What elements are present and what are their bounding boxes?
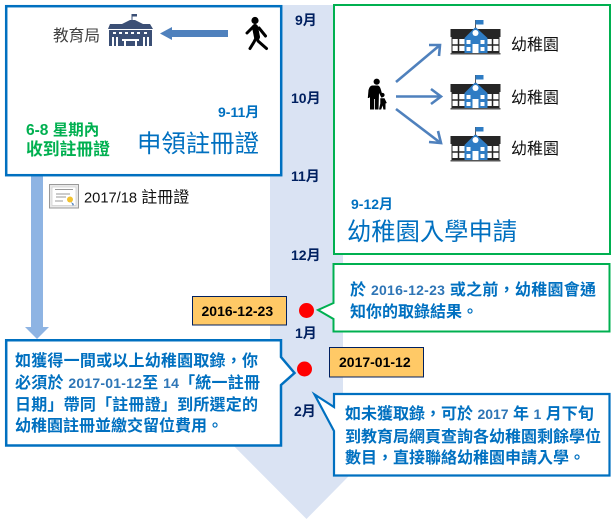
callout: if not admitted: 數目，直接聯絡幼稚園申請入學。 <box>345 448 585 467</box>
date tag: 2017-01-12 <box>330 348 424 377</box>
arrows: parent to kindergartens <box>396 45 441 143</box>
label: kindergarten 3: 幼稚園 <box>511 140 559 158</box>
arrow: certificate to enrolment <box>25 176 49 339</box>
month labels: 1月 <box>295 325 317 341</box>
date tag: 2016-12-23: 2016-12-23 <box>202 303 273 319</box>
callout: enrolment instructions: 幼稚園註冊並繳交留位費用。 <box>15 416 223 435</box>
heading: kindergarten admission application: 幼稚園入學申請 <box>347 219 517 246</box>
icon: walking person <box>247 17 266 48</box>
callout: if not admitted: 如未獲取錄，可於 2017 年 1 月下旬 <box>345 404 594 423</box>
note: certificate received in 6-8 weeks: 收到註冊證 <box>26 139 110 159</box>
marker: 2016-12-23 <box>299 303 314 318</box>
callout: enrolment instructions: 日期」帶同「註冊證」到所選定的 <box>15 395 258 414</box>
date: 9-12 months: 9-12月 <box>351 196 393 212</box>
callout: enrolment instructions: 如獲得一間或以上幼稚園取錄，你 <box>15 351 258 370</box>
note: certificate received in 6-8 weeks <box>26 121 110 159</box>
marker: 2017-01-12 <box>297 362 312 376</box>
month labels <box>291 12 321 419</box>
month labels: 12月 <box>291 247 321 263</box>
callout: result notification: 於 2016-12-23 或之前，幼稚園會通 <box>350 280 596 299</box>
panel: kindergarten application <box>334 5 610 254</box>
date: 9-11 months: 9-11月 <box>218 104 259 120</box>
date tag: 2017-01-12: 2017-01-12 <box>339 354 411 370</box>
icon: education bureau building <box>108 14 153 46</box>
label: kindergarten 2: 幼稚園 <box>511 89 559 107</box>
month labels: 9月 <box>295 12 317 28</box>
date tag: 2016-12-23 <box>192 296 286 325</box>
label: kindergarten 1: 幼稚園 <box>511 36 559 54</box>
timeline arrow band <box>206 5 406 519</box>
arrow: person to bureau <box>160 27 228 40</box>
icon: kindergarten 2 <box>450 75 500 110</box>
month labels: 11月 <box>291 168 320 184</box>
heading: apply for registration certificate: 申領註冊證 <box>137 131 259 158</box>
icon: kindergarten 3 <box>450 127 500 162</box>
icon: kindergarten 1 <box>450 20 500 54</box>
callout: if not admitted: 到教育局網頁查詢各幼稚園剩餘學位 <box>345 427 601 446</box>
callout: result notification: 知你的取錄結果。 <box>350 302 478 321</box>
callout: enrolment instructions <box>6 340 294 446</box>
label: 2017/18 certificate: 2017/18 註冊證 <box>84 188 189 206</box>
month labels: 2月 <box>294 403 316 419</box>
callout: enrolment instructions: 必須於 2017-01-12至 14「統一註冊 <box>15 373 260 392</box>
icon: parent and child <box>368 79 387 110</box>
note: certificate received in 6-8 weeks: 6-8 星期內 <box>26 121 99 139</box>
callout: result notification <box>318 264 610 332</box>
label: education bureau: 教育局 <box>53 26 100 45</box>
panel: apply for registration certificate <box>6 6 281 175</box>
callout: if not admitted <box>314 394 610 476</box>
icon: certificate <box>50 184 78 208</box>
month labels: 10月 <box>291 90 321 106</box>
